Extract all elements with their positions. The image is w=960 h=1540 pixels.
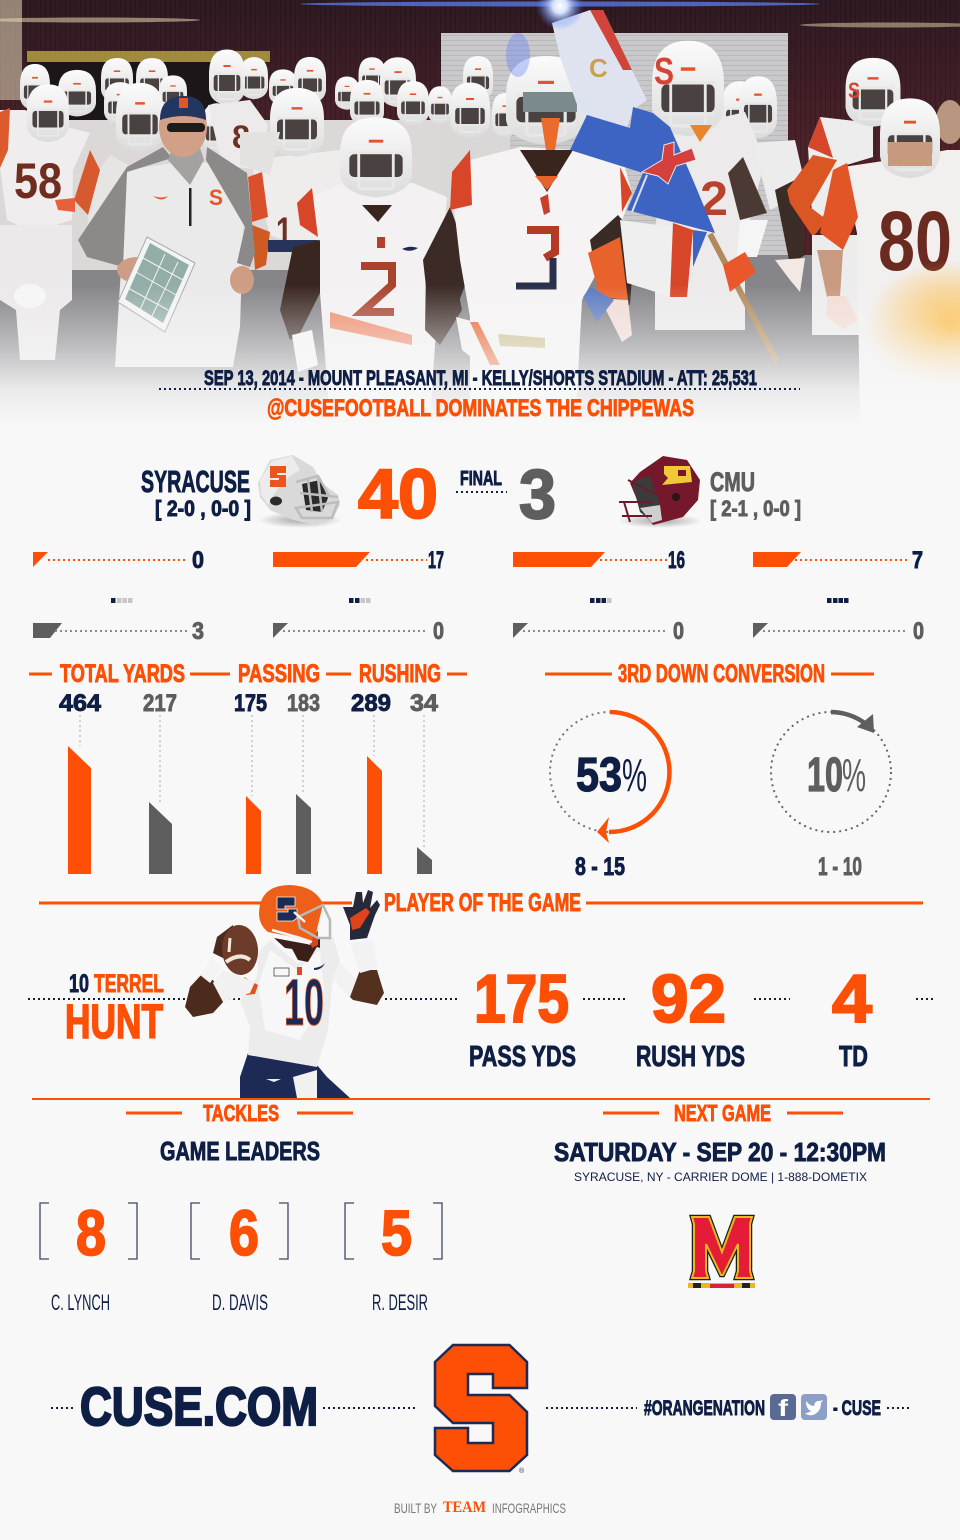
tackle leader: C. Lynch: C. LYNCH bbox=[51, 1290, 110, 1315]
passing values and bars bbox=[234, 690, 320, 874]
player name: 10 bbox=[69, 970, 89, 998]
player photo: Terrel Hunt bbox=[185, 885, 384, 1098]
player 1 behind coach bbox=[248, 88, 343, 270]
stat: passing yards: 175 bbox=[474, 961, 569, 1037]
quarter marker 4 bbox=[827, 598, 848, 603]
credit line bbox=[394, 1499, 566, 1516]
quarter 3 Syracuse: 16 bbox=[668, 547, 685, 574]
quarter marker 1 bbox=[111, 598, 132, 603]
CMU name and record: [ 2-1 , 0-0 ] bbox=[710, 496, 801, 521]
rushing values and bars: 289 bbox=[351, 690, 391, 717]
next game date: SATURDAY - SEP 20 - 12:30PM bbox=[554, 1137, 886, 1167]
CMU score: 3 bbox=[519, 455, 556, 533]
quarter 2 CMU: 0 bbox=[433, 618, 444, 645]
hero light flares bbox=[300, 0, 960, 390]
quarter 2 Syracuse: 17 bbox=[428, 547, 444, 574]
team flag on a pole: C bbox=[589, 53, 608, 83]
quarter 1 Syracuse bbox=[33, 547, 204, 574]
icon: facebook bbox=[770, 1394, 796, 1421]
stat: rushing yards: RUSH YDS bbox=[636, 1041, 745, 1073]
CMU name and record bbox=[710, 467, 801, 521]
quarter 2 Syracuse bbox=[273, 547, 444, 574]
player name bbox=[65, 970, 164, 1049]
quarter 4 Syracuse bbox=[753, 547, 923, 574]
coach bbox=[78, 96, 255, 367]
heading: yardage categories: RUSHING bbox=[359, 660, 441, 688]
icon: block S logo bbox=[435, 1345, 527, 1475]
quarter marker 2 bbox=[349, 598, 370, 603]
mid right player bbox=[753, 140, 805, 292]
icon: Maryland logo bbox=[688, 1217, 755, 1288]
quarter by quarter scoring bbox=[33, 547, 924, 645]
donut: CMU 3rd down: 10 bbox=[807, 749, 843, 802]
player 2 bbox=[280, 117, 462, 420]
quarter marker 3 bbox=[590, 598, 612, 603]
player 3 bbox=[423, 56, 635, 430]
player 1 second center bbox=[240, 132, 280, 175]
donut: CMU 3rd down: % bbox=[842, 749, 866, 801]
player 58 second helmet behind bbox=[74, 82, 164, 224]
jersey number 8 player: 8 bbox=[232, 119, 250, 155]
total yards values and bars bbox=[59, 690, 177, 874]
player with S helmet: S bbox=[654, 51, 674, 93]
quarter 4 CMU bbox=[753, 618, 924, 645]
player with S helmet: 2 bbox=[700, 173, 728, 226]
credit line: BUILT BY bbox=[394, 1500, 437, 1516]
right side player with orange sleeve bbox=[787, 58, 900, 335]
player with S helmet bbox=[652, 41, 768, 330]
quarter 3 Syracuse bbox=[513, 547, 685, 574]
icon: CMU helmet bbox=[618, 456, 702, 528]
donut: Syracuse 3rd down: 53 bbox=[576, 749, 622, 802]
heading: yardage categories: PASSING bbox=[238, 660, 320, 688]
quarter 1 Syracuse: 0 bbox=[192, 547, 204, 574]
player 1 behind coach: 1 bbox=[276, 210, 292, 254]
tackle leader: C. Lynch bbox=[40, 1197, 137, 1315]
website link: CUSE.COM bbox=[80, 1377, 318, 1437]
rushing values and bars bbox=[351, 690, 439, 874]
player name: TERREL bbox=[94, 970, 164, 998]
rushing values and bars: 34 bbox=[410, 690, 439, 717]
crowd of background helmets bbox=[0, 50, 777, 270]
stat: touchdowns: TD bbox=[839, 1041, 868, 1073]
heading: player of the game: PLAYER OF THE GAME bbox=[384, 889, 581, 917]
next game location: SYRACUSE, NY - CARRIER DOME | 1-888-DOMETIX bbox=[574, 1170, 867, 1184]
social hashtag and icons: #ORANGENATION bbox=[644, 1397, 765, 1420]
heading: next game: NEXT GAME bbox=[674, 1100, 771, 1126]
player 80 bbox=[817, 98, 960, 425]
player photo: Terrel Hunt: 10 bbox=[284, 965, 324, 1039]
tackle leader: R. Desir: 5 bbox=[381, 1197, 412, 1269]
stat: passing yards bbox=[469, 961, 576, 1073]
stat: touchdowns bbox=[832, 961, 872, 1073]
tackle leader: R. Desir: R. DESIR bbox=[372, 1290, 428, 1315]
team flag on a pole bbox=[552, 10, 777, 362]
CMU conversions: 1 - 10 bbox=[818, 853, 862, 881]
hero photo: team running onto the field bbox=[0, 0, 960, 430]
coach: S bbox=[209, 185, 223, 210]
donut: CMU 3rd down bbox=[771, 712, 891, 832]
tackle leader: D. Davis: D. DAVIS bbox=[212, 1290, 268, 1315]
Syracuse name and record: [ 2-0 , 0-0 ] bbox=[155, 496, 251, 521]
Syracuse conversions: 8 - 15 bbox=[575, 853, 625, 881]
player stats dotted line bbox=[28, 998, 933, 1000]
player name: HUNT bbox=[65, 996, 163, 1049]
quarter 3 CMU bbox=[513, 618, 684, 645]
tackle leader: C. Lynch: 8 bbox=[76, 1197, 106, 1269]
passing values and bars: 175 bbox=[234, 690, 267, 717]
social hashtag and icons: - CUSE bbox=[833, 1397, 881, 1420]
quarter 1 CMU: 3 bbox=[192, 618, 204, 645]
donut: Syracuse 3rd down bbox=[550, 712, 670, 843]
heading: tackles: TACKLES bbox=[203, 1100, 279, 1126]
heading: 3rd down conversion: 3RD DOWN CONVERSION bbox=[618, 660, 825, 688]
jersey number 8 player bbox=[208, 100, 268, 170]
credit line: INFOGRAPHICS bbox=[492, 1500, 566, 1516]
credit line: TEAM bbox=[443, 1499, 486, 1516]
passing values and bars: 183 bbox=[287, 690, 320, 717]
total yards values and bars: 217 bbox=[143, 690, 177, 717]
stat: touchdowns: 4 bbox=[832, 961, 872, 1037]
tackle leader: R. Desir bbox=[345, 1197, 442, 1315]
subheading: game leaders: GAME LEADERS bbox=[160, 1136, 320, 1166]
bar chart: yardage bbox=[59, 690, 439, 874]
icon: Syracuse helmet bbox=[258, 455, 342, 528]
social hashtag and icons bbox=[546, 1394, 910, 1421]
quarter 2 CMU bbox=[273, 618, 444, 645]
CMU name and record: CMU bbox=[710, 467, 755, 497]
total yards values and bars: 464 bbox=[59, 690, 102, 717]
right side player with orange sleeve: S bbox=[848, 78, 860, 103]
tackle leader: D. Davis bbox=[191, 1197, 288, 1315]
player 58: 58 bbox=[14, 153, 62, 209]
final label: FINAL bbox=[460, 468, 502, 490]
quarter 3 CMU: 0 bbox=[673, 618, 684, 645]
icon: block S logo: ® bbox=[519, 1467, 525, 1475]
quarter 1 CMU bbox=[33, 618, 204, 645]
scoreboard bbox=[141, 455, 801, 533]
donut: Syracuse 3rd down: % bbox=[622, 749, 647, 801]
icon: facebook: f bbox=[778, 1395, 788, 1421]
stat: passing yards: PASS YDS bbox=[469, 1041, 576, 1073]
heading: yardage categories bbox=[29, 660, 467, 688]
stat: rushing yards: 92 bbox=[651, 961, 726, 1037]
headline: @CUSEFOOTBALL DOMINATES THE CHIPPEWAS bbox=[267, 395, 694, 422]
heading: yardage categories: TOTAL YARDS bbox=[60, 660, 185, 688]
icon: twitter bbox=[801, 1394, 827, 1420]
Syracuse name and record: SYRACUSE bbox=[141, 464, 250, 499]
tackle leader: D. Davis: 6 bbox=[229, 1197, 259, 1269]
quarter 4 Syracuse: 7 bbox=[912, 547, 923, 574]
quarter 4 CMU: 0 bbox=[913, 618, 924, 645]
stat: rushing yards bbox=[636, 961, 745, 1073]
Syracuse score: 40 bbox=[358, 455, 438, 533]
Syracuse name and record bbox=[141, 464, 251, 521]
player 58 bbox=[0, 84, 90, 360]
